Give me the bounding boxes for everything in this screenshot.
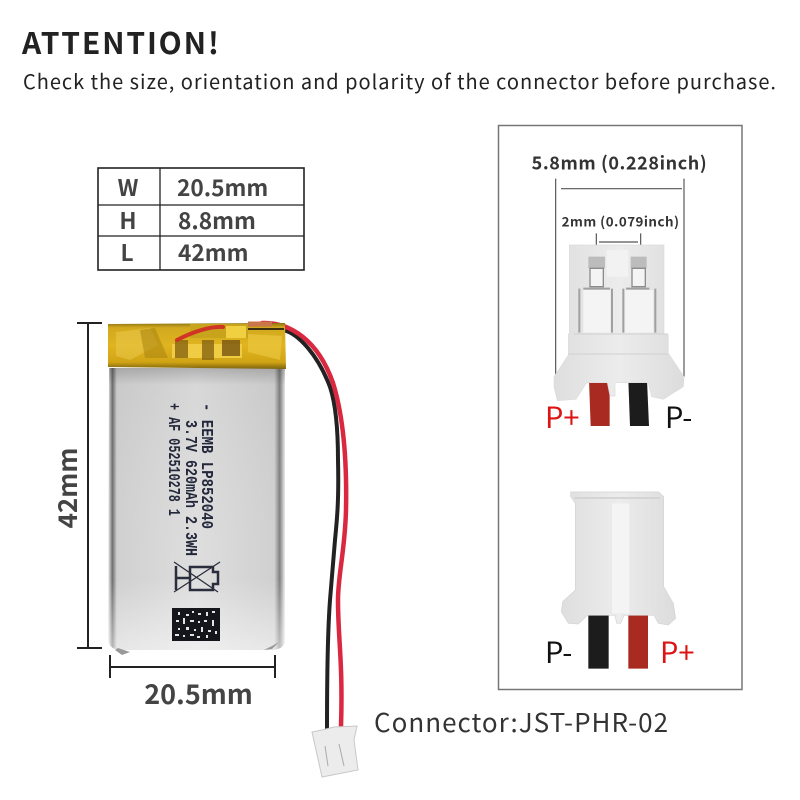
table values: 42mm <box>178 235 249 268</box>
wires <box>588 613 609 669</box>
battery width dimension: 20.5mm <box>144 673 253 712</box>
right contact <box>623 289 655 333</box>
connector back view <box>561 492 676 669</box>
printed battery label: 3.7V 620mAh 2.3WH <box>180 420 199 556</box>
left contact <box>579 289 612 333</box>
upper polarity labels: P- <box>665 395 692 437</box>
connector housing <box>554 245 684 401</box>
yellow tape <box>108 323 286 369</box>
table values: L <box>120 235 134 268</box>
width dimension lines <box>556 179 684 377</box>
printed battery label <box>163 403 215 556</box>
table values: 20.5mm <box>177 170 268 203</box>
table values: W <box>118 170 139 203</box>
upper polarity labels: P+ <box>545 395 579 437</box>
subtitle: Check the size, orientation and polarity of the connector before purchase. <box>23 66 776 95</box>
battery pouch <box>108 323 286 655</box>
title: ATTENTION! <box>21 19 219 63</box>
lower polarity labels: P+ <box>660 630 694 672</box>
width label: 5.8mm (0.228inch) <box>532 149 707 175</box>
pitch label: 2mm (0.079inch) <box>562 212 679 231</box>
panel: connector details <box>498 126 742 690</box>
back housing <box>561 492 676 625</box>
battery width dimension <box>110 655 275 712</box>
battery height dimension <box>48 323 102 648</box>
silver body <box>108 368 285 655</box>
small connector on wires <box>312 726 358 777</box>
wires <box>589 380 610 426</box>
battery height dimension: 42mm <box>48 448 85 528</box>
battery wires <box>262 323 346 728</box>
upper polarity labels <box>545 395 692 437</box>
dimensions table <box>98 168 304 270</box>
icon: crossed-out bin <box>174 562 220 592</box>
connector label: Connector:JST-PHR-02 <box>374 703 668 740</box>
lower polarity labels <box>545 630 694 672</box>
data matrix code <box>172 608 220 641</box>
pitch dimension lines <box>596 233 641 253</box>
printed battery label: + AF 052510278 1 <box>163 403 182 516</box>
connector front view <box>532 149 707 426</box>
printed battery label: - EEMB LP852040 <box>196 403 215 529</box>
table values <box>118 170 268 268</box>
table values: 8.8mm <box>178 203 256 236</box>
lower polarity labels: P- <box>545 630 572 672</box>
table values: H <box>119 203 137 236</box>
